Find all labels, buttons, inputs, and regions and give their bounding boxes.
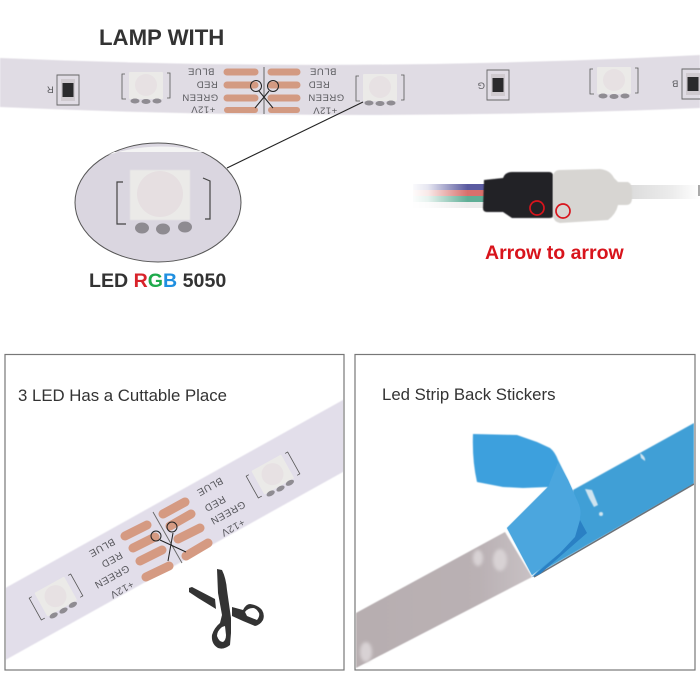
strip LEDs (122, 67, 638, 106)
callout: LED magnifier (75, 143, 241, 262)
pad labels: G (477, 80, 485, 90)
grey strip back (356, 532, 532, 668)
cut mark (151, 522, 186, 561)
contact pads (227, 72, 297, 110)
pad labels: +12V (108, 578, 135, 600)
callout line (227, 102, 363, 168)
strip resistors (57, 69, 700, 105)
pad labels: B (672, 78, 678, 88)
pad labels: GREEN (208, 498, 247, 526)
tape scuffs (585, 453, 645, 516)
panel: cuttable place (0, 354, 350, 670)
pad labels: RED (202, 493, 227, 513)
peeled tape curl (473, 434, 581, 575)
top LED strip (0, 55, 700, 116)
black plug (483, 172, 553, 218)
label: LED RGB 5050: LED RGB 5050 (89, 270, 226, 292)
strip edge (534, 484, 694, 577)
cut mark (250, 67, 278, 114)
pad labels: GREEN (308, 92, 344, 102)
pale scuffs (360, 549, 507, 662)
angled LED strip (0, 396, 350, 663)
pad labels: GREEN (92, 562, 131, 590)
pad labels: +12V (219, 516, 246, 538)
peeled strip (356, 423, 694, 668)
pad labels: +12V (191, 104, 215, 114)
pad labels (87, 474, 247, 600)
curl highlight (507, 462, 581, 575)
white plug (553, 169, 632, 223)
pad labels (46, 66, 678, 116)
pad labels: BLUE (310, 66, 336, 76)
pad labels: RED (196, 78, 218, 90)
label: Arrow to arrow: Arrow to arrow (485, 242, 625, 264)
icon: scissors (189, 569, 264, 649)
arrow markers (530, 201, 570, 218)
pad labels: BLUE (87, 535, 116, 559)
pad labels: BLUE (195, 474, 224, 498)
strip LEDs (28, 451, 303, 624)
wires (410, 182, 485, 210)
curl shadow (532, 520, 587, 577)
blue backing tape (532, 423, 694, 577)
contact pads (125, 502, 208, 577)
RGB connector (410, 169, 700, 223)
pad labels: BLUE (188, 66, 214, 76)
white cable (630, 185, 700, 199)
pad labels: R (46, 84, 54, 94)
heading: LAMP WITH: LAMP WITH (99, 25, 224, 50)
panel heading: 3 LED Has a Cuttable Place (18, 386, 227, 405)
pad labels: +12V (313, 104, 337, 116)
panel heading: Led Strip Back Stickers (382, 385, 555, 404)
pad labels: RED (99, 549, 124, 569)
cut line (153, 512, 182, 563)
panel: back stickers (355, 354, 695, 670)
pad labels: RED (308, 78, 330, 90)
pad labels: GREEN (182, 92, 218, 102)
